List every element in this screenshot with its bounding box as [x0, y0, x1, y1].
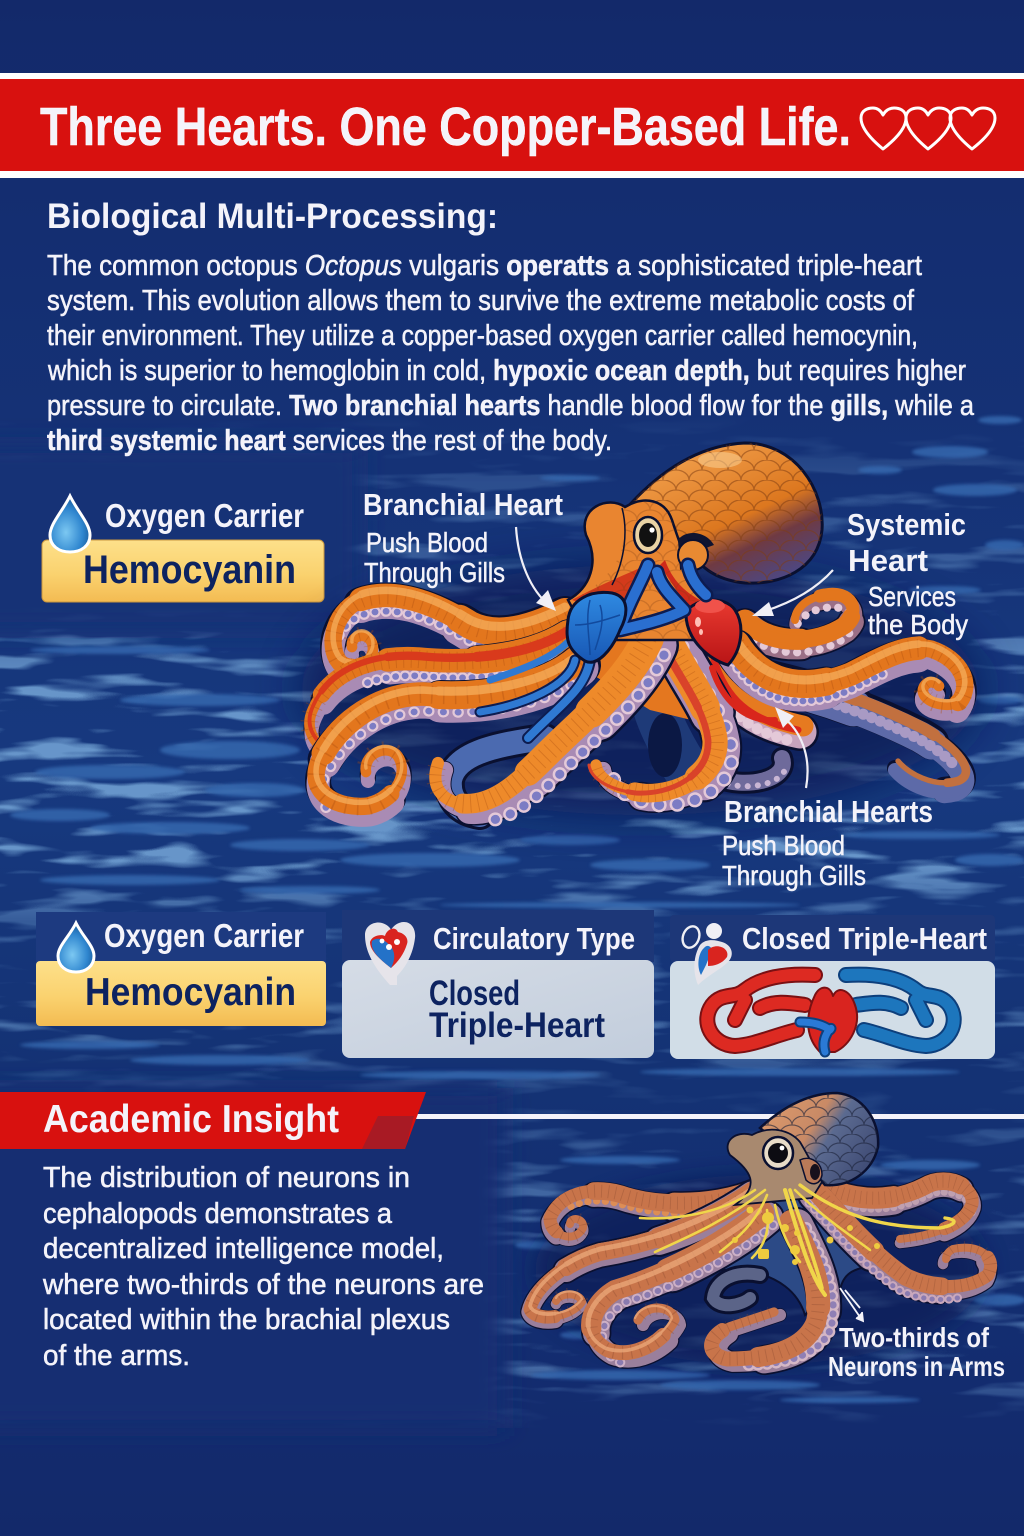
arrow	[516, 527, 556, 611]
panel: circulatory type: Closed	[429, 974, 520, 1013]
panel: oxygen carrier: Oxygen Carrier	[104, 917, 304, 954]
mantle	[625, 443, 822, 583]
illustration: octopus with three hearts	[300, 443, 980, 823]
label: systemic heart: Systemic	[847, 507, 966, 542]
heart: left branchial	[567, 592, 626, 662]
blue connecting vessels	[620, 565, 706, 630]
intro paragraph: which is superior to hemoglobin in cold, hypoxic ocean depth, but requires higher	[47, 355, 966, 387]
label: systemic heart: Services	[868, 581, 956, 612]
label: branchial heart: Push Blood	[366, 527, 488, 558]
panel: oxygen carrier: Hemocyanin	[85, 971, 296, 1014]
insight paragraph: cephalopods demonstrates a	[43, 1198, 393, 1230]
panel: closed triple-heart	[670, 915, 995, 1059]
body hub	[575, 610, 742, 725]
arm: left lower	[316, 655, 583, 823]
label: two-thirds of neurons: Two-thirds of	[839, 1322, 990, 1353]
insight paragraph	[42, 1162, 484, 1372]
label: branchial hearts	[722, 707, 933, 891]
label: two-thirds of neurons	[828, 1322, 1005, 1382]
label: systemic heart: Heart	[848, 543, 928, 578]
icon: water drop	[58, 923, 94, 972]
label: systemic heart	[752, 507, 968, 640]
arm: centre left	[435, 638, 664, 821]
intro paragraph: system. This evolution allows them to survive the extreme metabolic costs of	[47, 285, 915, 317]
intro paragraph	[47, 250, 975, 457]
ocean water texture	[0, 414, 1024, 1420]
panel: circulatory type: Triple-Heart	[429, 1006, 605, 1045]
arm: inner right	[713, 656, 803, 742]
arm: right long	[733, 640, 965, 722]
insight paragraph: where two-thirds of the neurons are	[42, 1269, 484, 1301]
panel: circulatory type: Circulatory Type	[433, 921, 635, 956]
divider line	[400, 1114, 1024, 1119]
octopus head	[568, 501, 714, 640]
neuron network	[640, 1185, 954, 1295]
arm: upper left	[333, 590, 565, 683]
callout: oxygen carrier: Hemocyanin	[83, 548, 296, 592]
panel: oxygen carrier	[36, 912, 326, 1026]
panel: closed triple-heart: Closed Triple-Heart	[742, 921, 987, 956]
icon: three hearts	[861, 108, 995, 149]
insight paragraph: located within the brachial plexus	[43, 1304, 450, 1336]
label: branchial heart: Through Gills	[364, 557, 505, 588]
blue veins	[480, 642, 775, 738]
diagram: circulatory loops	[707, 975, 954, 1052]
insight paragraph: The distribution of neurons in	[43, 1162, 410, 1194]
back arm	[713, 1274, 760, 1305]
insight paragraph: decentralized intelligence model,	[43, 1233, 444, 1265]
panel: circulatory type	[342, 910, 654, 1058]
title: Three Hearts. One Copper-Based Life.	[40, 97, 851, 157]
arm: centre down	[589, 635, 732, 805]
callout: oxygen carrier: Oxygen Carrier	[105, 497, 304, 534]
callout: oxygen carrier	[42, 496, 324, 602]
illustration: octopus with neurons	[530, 1093, 1005, 1382]
intro heading: Biological Multi-Processing:	[47, 197, 498, 236]
label: branchial hearts: Through Gills	[722, 860, 866, 891]
header banner	[0, 73, 1024, 178]
arrow	[752, 570, 833, 616]
heart: right systemic	[686, 599, 741, 665]
arrow	[840, 1288, 863, 1321]
intro paragraph: The common octopus Octopus vulgaris operatts a sophisticated triple-heart	[47, 250, 922, 282]
banner: academic insight	[0, 1092, 426, 1149]
intro paragraph: third systemic heart services the rest of the body.	[47, 425, 612, 457]
head	[728, 1130, 822, 1205]
mantle	[760, 1093, 878, 1185]
label: systemic heart: the Body	[868, 609, 968, 640]
arm: left long	[309, 631, 573, 763]
icon: water drop	[50, 496, 90, 552]
arrow	[775, 707, 808, 788]
label: branchial heart: Branchial Heart	[363, 487, 563, 522]
web	[700, 1190, 880, 1315]
arms	[530, 1181, 991, 1365]
banner: academic insight: Academic Insight	[43, 1098, 339, 1141]
arm: right upper	[745, 594, 853, 652]
icon: eye	[634, 517, 662, 553]
icon: heart badge	[365, 922, 415, 985]
insight paragraph: of the arms.	[43, 1340, 190, 1372]
label: branchial heart	[363, 487, 563, 611]
intro paragraph: pressure to circulate. Two branchial hearts handle blood flow for the gills, while a	[47, 390, 975, 422]
label: branchial hearts: Branchial Hearts	[724, 794, 933, 829]
label: branchial hearts: Push Blood	[722, 830, 845, 861]
icon: heart with rings	[680, 923, 732, 985]
arms	[309, 590, 965, 823]
icon: eye	[763, 1137, 793, 1169]
back arms	[450, 673, 966, 815]
